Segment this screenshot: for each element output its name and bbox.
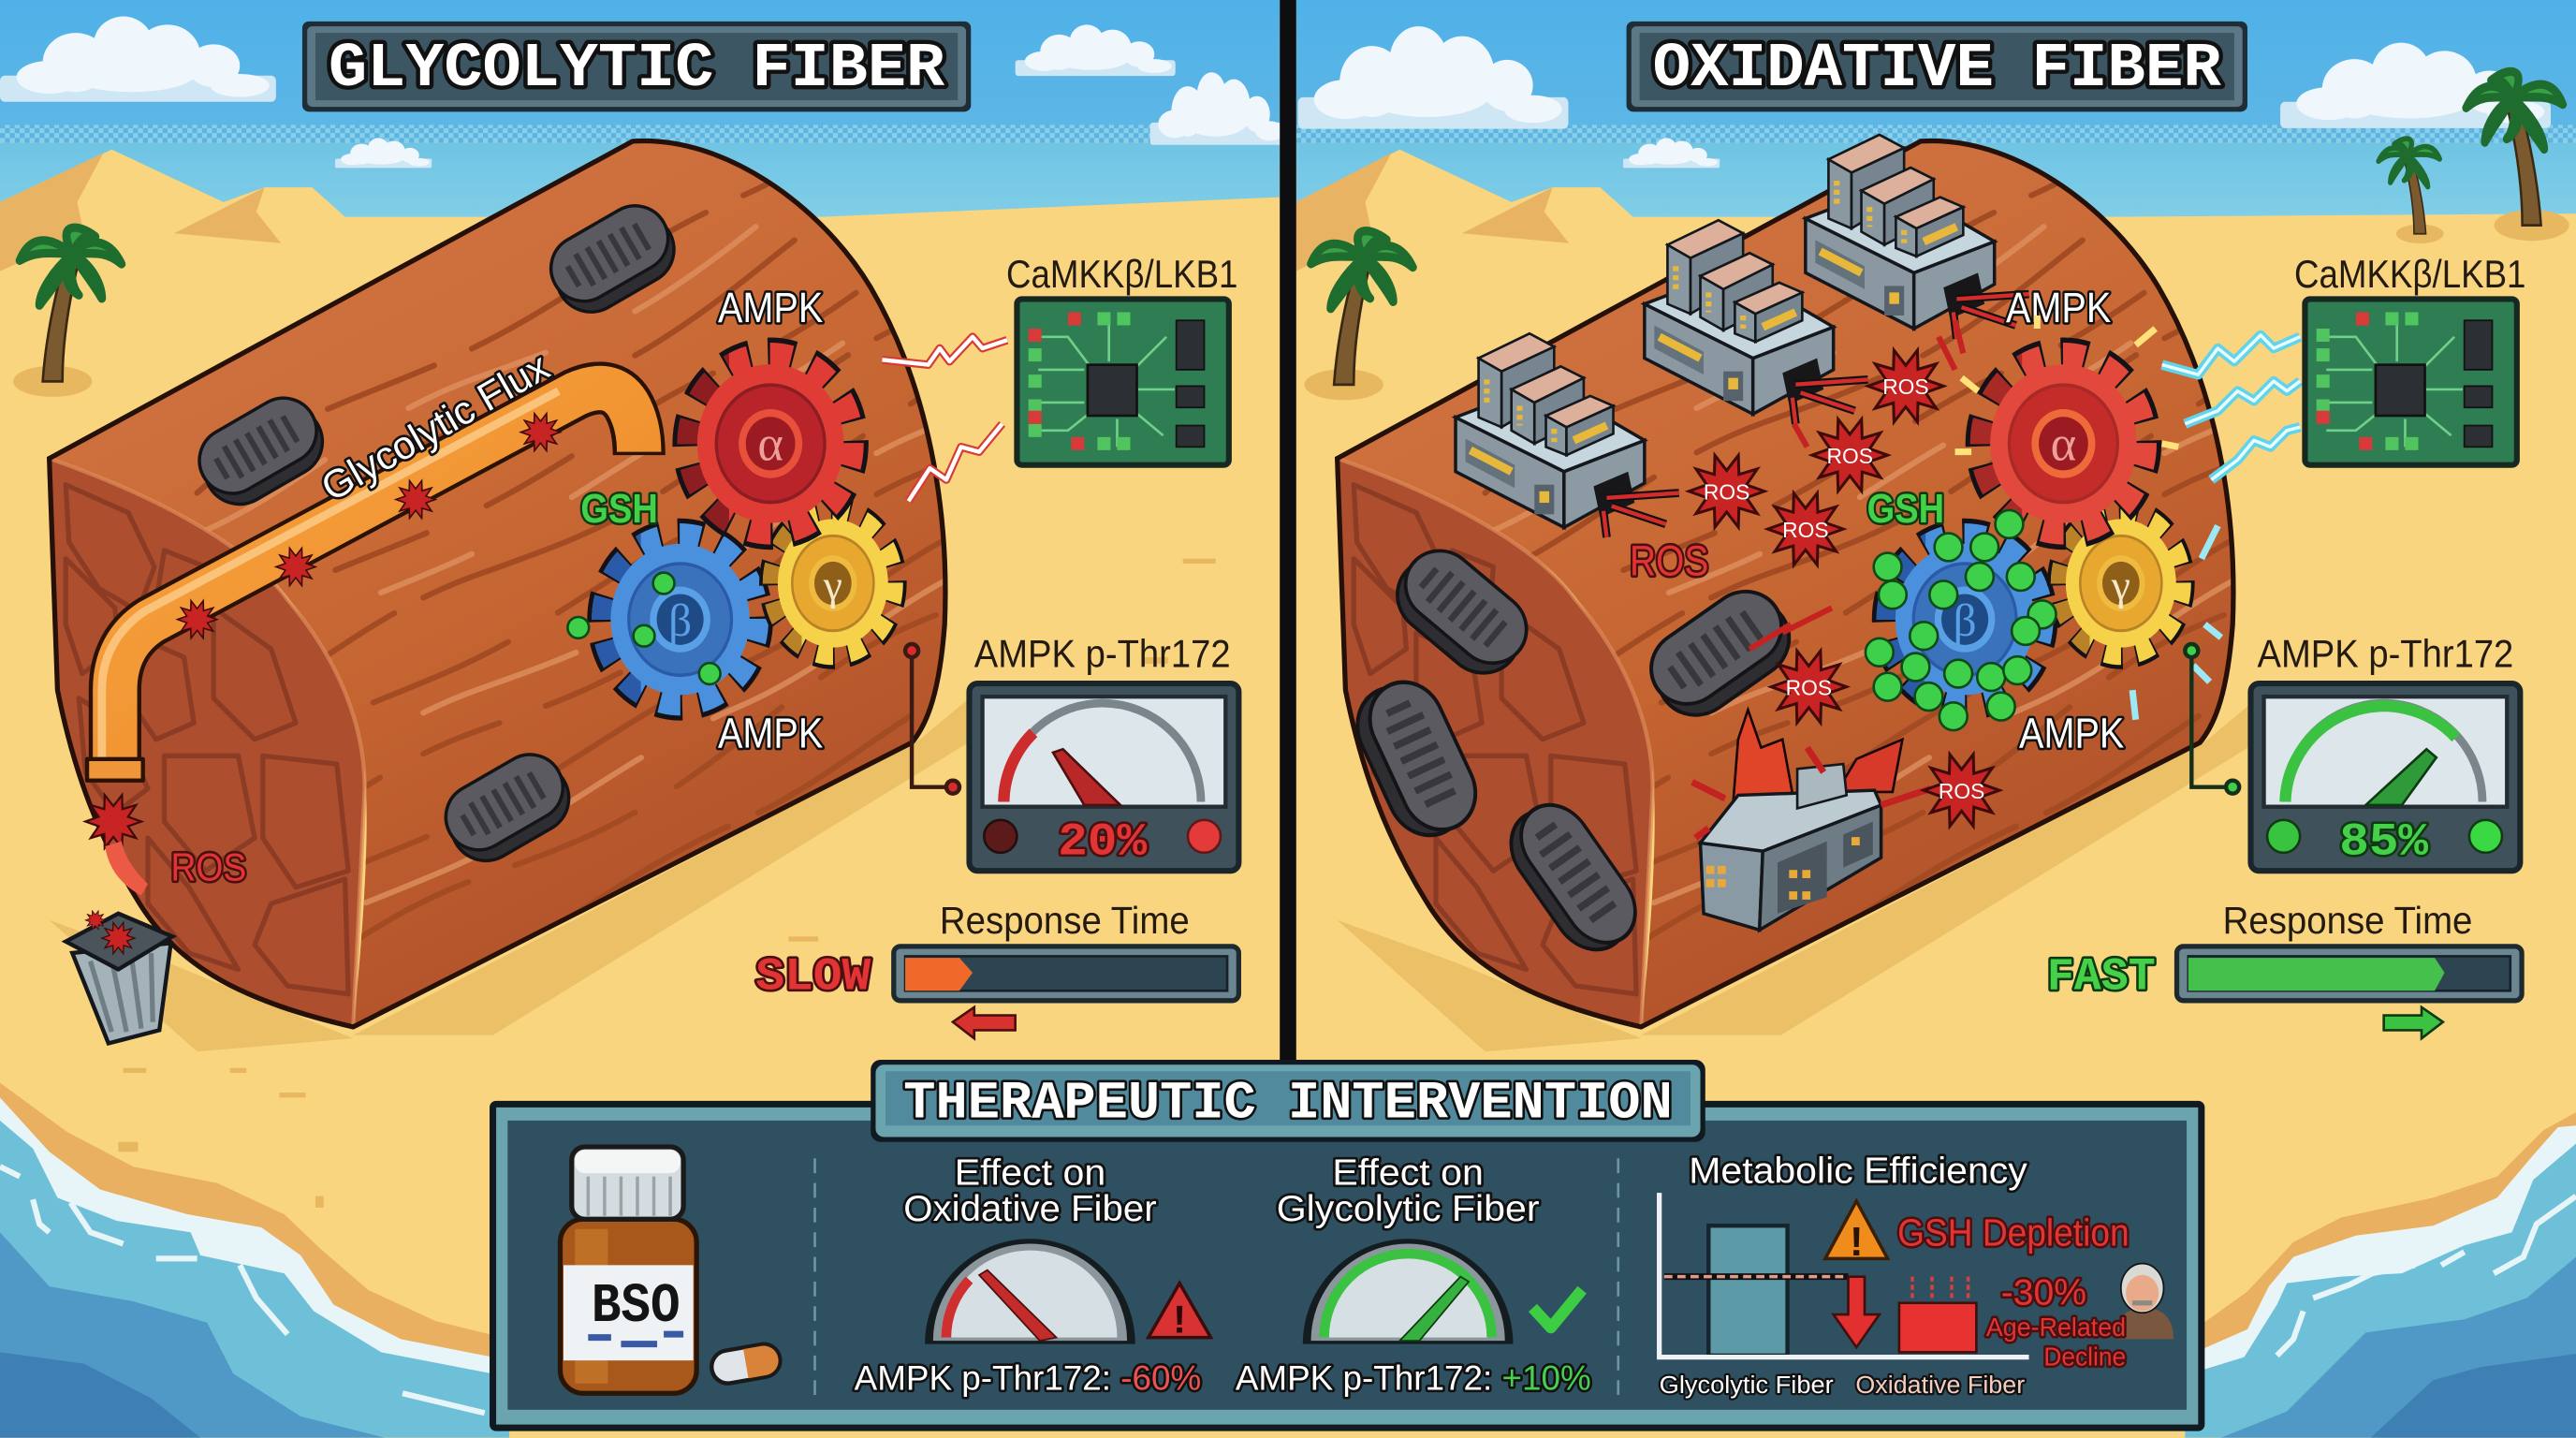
ROS stars: ROS: [1782, 518, 1829, 542]
value: 85%: [2339, 816, 2429, 869]
center divider: [1280, 0, 1296, 1064]
label: ROS: ROS: [171, 845, 246, 889]
gear: alpha subunit: α: [2051, 417, 2076, 471]
sand dunes: [1296, 153, 1569, 271]
connector line: [2185, 644, 2239, 794]
ROS stars: ROS: [1786, 675, 1832, 699]
label: AMPK p-Thr172: AMPK p-Thr172: [2258, 632, 2513, 676]
heading: [871, 1060, 1705, 1142]
water corner: [2185, 1112, 2576, 1438]
clouds: [0, 17, 1288, 168]
label: glycolytic AMPK: AMPK p-Thr172: +10%: [1236, 1359, 1591, 1398]
weak signal lightning: [882, 337, 1007, 501]
response time bar: [894, 946, 1238, 1001]
label: effect on oxidative fiber: [903, 1152, 1157, 1229]
label: Response Time: Response Time: [940, 899, 1190, 942]
label: age-related decline: Age-Related: [1986, 1313, 2126, 1342]
clouds: [1298, 26, 2551, 168]
sand speckles: [118, 559, 1216, 1208]
label: effect on oxidative fiber: Effect on: [955, 1152, 1105, 1193]
mitochondria: [1344, 536, 1804, 964]
panel: oxidative fiber: [1296, 0, 2576, 1438]
heading: THERAPEUTIC INTERVENTION: [903, 1073, 1673, 1133]
damaged factory: [1692, 710, 1930, 930]
arrow: fast: [2384, 1007, 2443, 1038]
icon: check mark: [1533, 1290, 1582, 1328]
label: AMPK top: AMPK: [718, 284, 823, 331]
label: age-related decline: [1986, 1313, 2126, 1371]
circuit board: [2305, 299, 2517, 465]
label: GSH: GSH: [580, 486, 658, 532]
palm tree: [13, 227, 122, 397]
ROS stars: ROS: [1704, 480, 1749, 505]
gear: alpha subunit: [689, 356, 852, 532]
ROS stars: ROS: [1939, 779, 1984, 803]
icon: warning: !: [1173, 1297, 1186, 1341]
icon: orange warning: [1825, 1201, 1888, 1265]
muscle fiber log: [50, 33, 1051, 1438]
BSO bottle: [560, 1147, 696, 1393]
label: metabolic efficiency: Metabolic Efficiency: [1689, 1152, 2028, 1192]
label: ROS: ROS: [1630, 536, 1708, 584]
strong signal lightning: [2162, 335, 2300, 479]
capsule: [709, 1342, 783, 1386]
ROS in pipe: [178, 414, 560, 638]
gear: gamma subunit: [2059, 512, 2221, 720]
background: sea horizon: [1296, 125, 2576, 233]
gear: beta subunit: β: [668, 594, 692, 646]
gauge: 85%: [2250, 683, 2520, 871]
circuit board: [1017, 299, 1229, 465]
background: sand: [1296, 150, 2576, 1438]
gear: gamma subunit: γ: [2111, 562, 2130, 609]
label: oxidative axis: Oxidative Fiber: [1855, 1371, 2025, 1399]
icon: elderly person: [2116, 1264, 2174, 1339]
label: glycolytic flux: Glycolytic Flux: [314, 345, 556, 509]
LEDs: [2267, 820, 2502, 853]
arrow: slow: [953, 1007, 1016, 1038]
icon: orange warning: !: [1850, 1219, 1864, 1265]
muscle fiber log: [1338, 33, 2339, 1438]
label: SLOW: SLOW: [755, 951, 871, 1004]
title: oxidative fiber: OXIDATIVE FIBER: [1653, 34, 2221, 105]
gauge: 20%: [970, 683, 1238, 871]
panel: therapeutic intervention: [490, 1060, 2204, 1431]
title: glycolytic fiber: GLYCOLYTIC FIBER: [329, 34, 944, 105]
panel: glycolytic fiber: [0, 0, 1288, 1438]
gear: beta subunit: [603, 536, 757, 703]
sand dunes: [0, 153, 281, 271]
background: sky: [0, 0, 1280, 128]
label: GSH: GSH: [1867, 486, 1944, 532]
label: AMPK bottom: AMPK: [2019, 710, 2124, 757]
label: oxidative AMPK: AMPK p-Thr172: -60%: [855, 1359, 1201, 1398]
label: AMPK top: AMPK: [2006, 284, 2111, 331]
background: sea horizon: [0, 125, 1280, 233]
LEDs: [984, 820, 1221, 853]
label: age-related decline: Decline: [2043, 1342, 2126, 1371]
ROS stars: ROS: [1882, 374, 1929, 399]
gear: alpha subunit: α: [757, 417, 783, 471]
icon: warning: [1149, 1284, 1211, 1341]
water corner: [0, 1083, 509, 1438]
label: -30%: -30%: [2001, 1272, 2086, 1313]
gear: alpha subunit: [1955, 315, 2178, 532]
response time bar: [2177, 946, 2522, 1001]
background: sky: [1296, 0, 2576, 128]
palm trees: [1305, 71, 2569, 400]
label: FAST: FAST: [2047, 951, 2156, 1004]
BSO bottle: BSO: [592, 1274, 681, 1338]
ROS leak: [85, 795, 148, 895]
label: glycolytic axis: Glycolytic Fiber: [1660, 1371, 1834, 1399]
label: CaMKK: CaMKKβ/LKB1: [2294, 252, 2525, 296]
label: Response Time: Response Time: [2223, 899, 2472, 942]
label: effect on glycolytic fiber: Glycolytic Fiber: [1277, 1189, 1540, 1229]
GSH dots: [1866, 510, 2056, 730]
gear: beta subunit: [1888, 536, 2042, 703]
trash bin: [66, 911, 172, 1043]
gauge: glycolytic rise: [1303, 1239, 1513, 1344]
background: sand: [0, 150, 1280, 1438]
bar chart: [1660, 1193, 2029, 1357]
label: AMPK bottom: AMPK: [718, 710, 823, 757]
glycolytic flux pipe: [87, 388, 639, 781]
label: effect on glycolytic fiber: Effect on: [1332, 1152, 1484, 1193]
label: AMPK p-Thr172: AMPK p-Thr172: [974, 632, 1231, 676]
gear: gamma subunit: [771, 512, 894, 654]
GSH dots: [567, 573, 721, 684]
gear: beta subunit: β: [1954, 594, 1977, 646]
label: effect on glycolytic fiber: [1277, 1152, 1540, 1229]
connector line: [905, 644, 959, 794]
value: 20%: [1058, 816, 1148, 869]
mitochondria: [187, 194, 686, 873]
ROS stars: ROS: [1827, 444, 1873, 468]
dividers: [815, 1158, 1618, 1397]
factories: mitochondrial network: [1456, 135, 2029, 537]
ROS stars: [1689, 320, 1999, 827]
panel frame: [490, 1101, 2204, 1431]
label: GSH depletion: GSH Depletion: [1897, 1211, 2130, 1254]
label: CaMKK: CaMKKβ/LKB1: [1006, 252, 1237, 296]
label: effect on oxidative fiber: Oxidative Fiber: [903, 1189, 1157, 1229]
gear: gamma subunit: γ: [823, 562, 842, 609]
gauge: oxidative drop: [925, 1239, 1135, 1344]
